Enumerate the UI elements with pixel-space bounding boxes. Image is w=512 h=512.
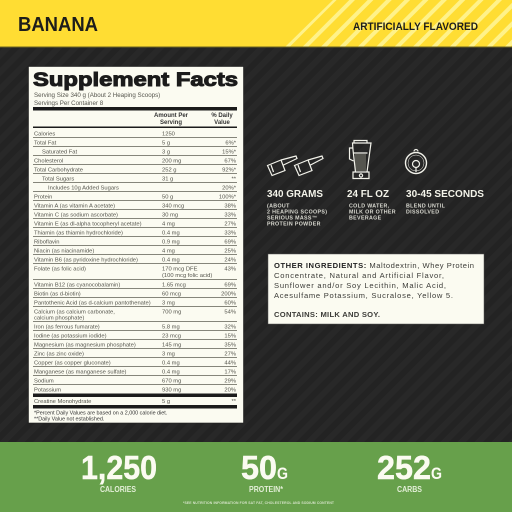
nutrient rows: Iodine (as potassium iodide) (34, 334, 107, 340)
step: 340 grams: SERIOUS MASS™ (267, 216, 317, 222)
column headers: Serving (160, 120, 182, 126)
nutrient rows: 60% (224, 300, 236, 306)
nutrient rows: 145 mg (162, 342, 181, 348)
step: 24 fl oz: MILK OR OTHER (349, 210, 396, 216)
nutrient rows: Magnesium (as magnesium phosphate) (34, 342, 136, 348)
nutrient rows: Includes 10g Added Sugars (48, 186, 119, 192)
step: 24 fl oz (347, 188, 396, 222)
stat: carbs (377, 449, 442, 494)
nutrient rows: Vitamin E (as dl-alpha tocopheryl acetate) (34, 222, 142, 228)
footnote: *SEE NUTRITION INFORMATION FOR SAT FAT, CHOLESTEROL AND SODIUM CONTENT (183, 501, 335, 505)
stat: protein: G (277, 464, 288, 483)
nutrient rows: 340 mcg (162, 204, 184, 210)
serving info (34, 92, 160, 107)
nutrient rows: 1250 (162, 132, 175, 138)
nutrient rows: Folate (as folic acid) (34, 266, 86, 272)
stat: calories: 1,250 (81, 449, 157, 486)
nutrient rows: Total Sugars (42, 176, 74, 182)
nutrient rows: 23 mcg (162, 334, 181, 340)
nutrient rows: Protein (34, 194, 52, 200)
stat: protein: 50 (241, 449, 277, 486)
nutrient rows: 4 mg (162, 248, 175, 254)
panel: other ingredients: Acesulfame Potassium, Sucralose, Yellow 5. (274, 291, 453, 300)
panel: other ingredients (268, 254, 484, 324)
nutrient rows: 3 g (162, 150, 170, 156)
creatine row: Creatine Monohydrate (34, 399, 91, 405)
creatine row: 5 g (162, 399, 170, 405)
nutrient rows: 44% (224, 360, 236, 366)
nutrient rows: 100%* (219, 194, 237, 200)
creatine row (34, 399, 237, 405)
step: 30-45 seconds: DISSOLVED (406, 210, 439, 216)
nutrient rows: 29% (224, 378, 236, 384)
nutrient rows: 32% (224, 324, 236, 330)
nutrient rows: Vitamin B12 (as cyanocobalamin) (34, 282, 120, 288)
nutrient rows: Calories (34, 132, 55, 138)
creatine row: ** (231, 399, 237, 405)
nutrient rows: Manganese (as manganese sulfate) (34, 370, 127, 376)
stat: carbs: G (431, 464, 442, 483)
serving info: Servings Per Container 8 (34, 100, 104, 107)
nutrient rows: Calcium (as calcium carbonate, (34, 310, 115, 316)
step: 30-45 seconds: 30-45 SECONDS (406, 188, 484, 200)
nutrient rows: 252 g (162, 168, 177, 174)
footnotes: **Daily Value not established. (34, 416, 104, 422)
nutrient rows: Pantothenic Acid (as d-calcium pantothenate) (34, 300, 151, 306)
stat: carbs: 252 (377, 449, 431, 486)
stat: protein (241, 449, 288, 494)
nutrient rows: 5 g (162, 140, 170, 146)
nutrient rows: Potassium (34, 388, 61, 394)
nutrient rows: 4 mg (162, 222, 175, 228)
rule lines (33, 138, 237, 384)
nutrient rows: 3 mg (162, 352, 175, 358)
column headers: Amount Per (154, 113, 189, 119)
nutrient rows: 69% (224, 282, 236, 288)
nutrient rows: 20%* (222, 186, 237, 192)
nutrient rows: Vitamin A (as vitamin A acetate) (34, 204, 115, 210)
step: 24 fl oz: BEVERAGE (349, 216, 382, 222)
header band (0, 0, 512, 48)
step: 24 fl oz: 24 FL OZ (347, 188, 390, 200)
heading: Supplement Facts (33, 69, 238, 91)
nutrient rows: 67% (224, 158, 236, 164)
nutrient rows: 30 mg (162, 212, 178, 218)
nutrient rows: 60 mcg (162, 292, 181, 298)
stat: carbs: CARBS (397, 485, 422, 494)
nutrient rows: 24% (224, 258, 236, 264)
footnotes (34, 410, 167, 422)
nutrient rows: ** (231, 176, 237, 182)
nutrient rows: Niacin (as niacinamide) (34, 248, 94, 254)
nutrient rows: 670 mg (162, 378, 181, 384)
nutrient rows: Biotin (as d-biotin) (34, 292, 81, 298)
nutrient rows: Sodium (34, 378, 54, 384)
stat: protein: PROTEIN* (249, 485, 284, 494)
nutrient rows: Vitamin C (as sodium ascorbate) (34, 212, 118, 218)
nutrient rows: 35% (224, 342, 236, 348)
serving info: Serving Size 340 g (About 2 Heaping Scoops) (34, 92, 160, 99)
nutrient rows: Copper (as copper gluconate) (34, 360, 111, 366)
step: 340 grams: (ABOUT (267, 204, 290, 210)
nutrient rows: Cholesterol (34, 158, 63, 164)
nutrient rows: calcium phosphate) (34, 316, 84, 322)
footnotes: *Percent Daily Values are based on a 2,000 calorie diet. (34, 410, 167, 416)
nutrient rows: 0.4 mg (162, 370, 180, 376)
nutrient rows: Zinc (as zinc oxide) (34, 352, 84, 358)
step: 340 grams: PROTEIN POWDER (267, 222, 321, 228)
nutrient rows: 25% (224, 248, 236, 254)
nutrient rows: Total Carbohydrate (34, 168, 83, 174)
nutrient rows: 3 mg (162, 300, 175, 306)
panel: other ingredients: Concentrate, Natural and Artificial Flavor, (274, 271, 444, 280)
step: 340 grams (267, 188, 327, 228)
icon: scoops (268, 156, 323, 176)
nutrient rows: 0.4 mg (162, 230, 180, 236)
nutrient rows: Iron (as ferrous fumarate) (34, 324, 100, 330)
panel: other ingredients: OTHER INGREDIENTS: Maltodextrin, Whey Protein (274, 261, 474, 270)
nutrient rows: (100 mcg folic acid) (162, 273, 212, 279)
nutrient rows: 1.65 mcg (162, 282, 186, 288)
panel: supplement facts (28, 66, 244, 423)
nutrient rows: 200% (221, 292, 236, 298)
nutrient rows: 92%* (222, 168, 237, 174)
nutrient rows: 5.8 mg (162, 324, 180, 330)
nutrient rows: 170 mcg DFE (162, 266, 198, 272)
nutrient rows: Riboflavin (34, 240, 59, 246)
nutrient rows: 27% (224, 352, 236, 358)
column headers: Value (214, 120, 230, 126)
nutrient rows: 33% (224, 212, 236, 218)
footer band (0, 442, 512, 512)
nutrient rows: 27% (224, 222, 236, 228)
nutrient rows: 200 mg (162, 158, 181, 164)
icon: timer (406, 150, 426, 174)
nutrient rows (34, 132, 237, 394)
flavor title: BANANA (18, 13, 98, 36)
nutrient rows: 69% (224, 240, 236, 246)
column headers (154, 113, 233, 126)
nutrient rows: 50 g (162, 194, 173, 200)
nutrient rows: 15% (224, 334, 236, 340)
step: 340 grams: 2 HEAPING SCOOPS) (267, 210, 327, 216)
nutrient rows: 930 mg (162, 388, 181, 394)
column headers: % Daily (211, 113, 233, 119)
nutrient rows: 38% (224, 204, 236, 210)
step: 24 fl oz: COLD WATER, (349, 204, 390, 210)
nutrient rows: 31 g (162, 176, 173, 182)
stat: calories: CALORIES (100, 485, 136, 494)
panel: other ingredients: CONTAINS: MILK AND SOY. (274, 310, 380, 319)
nutrient rows: 33% (224, 230, 236, 236)
icon: blender (350, 140, 371, 178)
nutrient rows: 0.4 mg (162, 258, 180, 264)
step: 340 grams: 340 GRAMS (267, 188, 323, 200)
step: 30-45 seconds (406, 188, 484, 216)
nutrient rows: 43% (224, 266, 236, 272)
panel: other ingredients: Sunflower and/or Soy Lecithin, Malic Acid, (274, 281, 446, 290)
nutrient rows: Vitamin B6 (as pyridoxine hydrochloride) (34, 258, 138, 264)
step: 30-45 seconds: BLEND UNTIL (406, 204, 446, 210)
nutrient rows: 0.9 mg (162, 240, 180, 246)
nutrient rows: 17% (224, 370, 236, 376)
nutrient rows: 700 mg (162, 310, 181, 316)
nutrient rows: Thiamin (as thiamin hydrochloride) (34, 230, 123, 236)
nutrient rows: 6%* (225, 140, 237, 146)
nutrient rows: 54% (224, 310, 236, 316)
nutrient rows: 20% (224, 388, 236, 394)
nutrient rows: Total Fat (34, 140, 57, 146)
dark background (0, 47, 512, 442)
flavor note: ARTIFICIALLY FLAVORED (353, 21, 478, 33)
nutrient rows: 0.4 mg (162, 360, 180, 366)
nutrient rows: 15%* (222, 150, 237, 156)
nutrient rows: Saturated Fat (42, 150, 78, 156)
